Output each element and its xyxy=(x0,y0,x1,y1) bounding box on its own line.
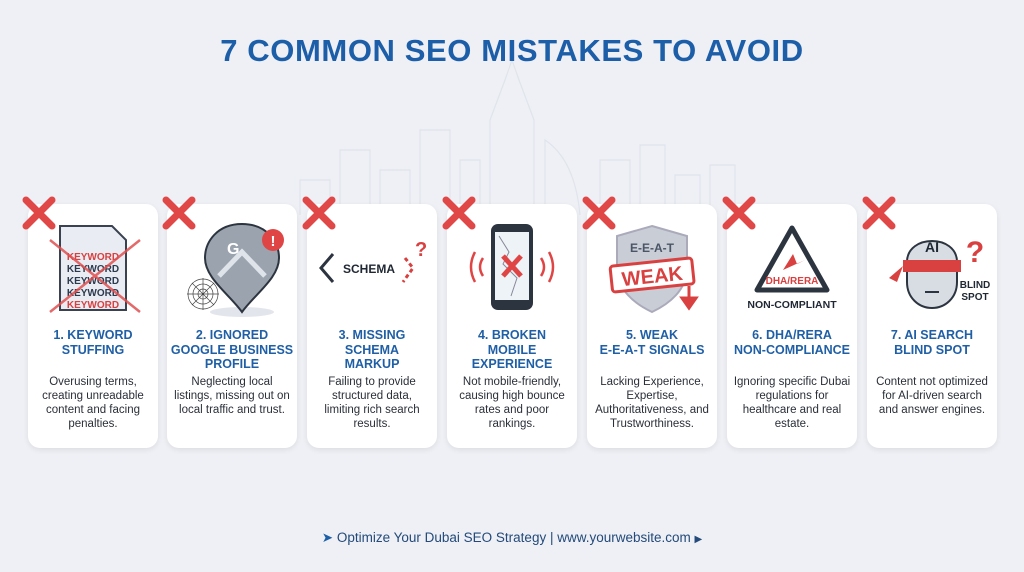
card 5 xyxy=(587,204,717,448)
description: Content not optimized for AI-driven search and answer engines. xyxy=(876,376,988,416)
heading xyxy=(53,328,133,356)
heading: STUFFING xyxy=(62,342,124,356)
heading: SCHEMA xyxy=(345,342,399,356)
heading xyxy=(891,328,973,356)
heading xyxy=(171,328,293,371)
heading: MOBILE xyxy=(488,342,536,356)
heading: PROFILE xyxy=(205,357,259,371)
heading: EXPERIENCE xyxy=(472,357,552,371)
icon: keyword document xyxy=(49,225,141,313)
icon: broken phone xyxy=(470,224,554,310)
heading: E-E-A-T SIGNALS xyxy=(600,342,704,356)
heading: MARKUP xyxy=(345,357,399,371)
heading xyxy=(472,328,552,371)
icon: map pin: G xyxy=(227,241,239,258)
icon: warning triangle: NON-COMPLIANT xyxy=(747,299,837,311)
icon: keyword document: KEYWORD xyxy=(67,300,119,311)
heading: 7. AI SEARCH xyxy=(891,328,973,342)
description: Ignoring specific Dubai regulations for healthcare and real estate. xyxy=(734,376,850,430)
icon: blindfolded AI head: AI xyxy=(925,239,939,255)
heading: 5. WEAK xyxy=(626,328,678,342)
icon: blindfolded AI head: ? xyxy=(966,236,984,269)
heading: 4. BROKEN xyxy=(478,328,546,342)
description: Not mobile-friendly, causing high bounce rates and poor rankings. xyxy=(459,376,565,430)
icon: schema brackets: SCHEMA xyxy=(343,262,395,276)
icon: weak shield: E-E-A-T xyxy=(630,241,675,255)
heading xyxy=(734,328,850,356)
icon: map pin: ! xyxy=(270,233,276,250)
title: 7 COMMON SEO MISTAKES TO AVOID xyxy=(220,33,804,68)
heading: 6. DHA/RERA xyxy=(752,328,832,342)
card 2 xyxy=(167,204,297,448)
description: Lacking Experience, Expertise, Authoritativeness, and Trustworthiness. xyxy=(595,376,709,430)
heading xyxy=(339,328,405,371)
icon: map pin xyxy=(187,223,284,317)
description: Failing to provide structured data, limiting rich search results. xyxy=(324,376,420,430)
heading: NON-COMPLIANCE xyxy=(734,342,850,356)
heading: 3. MISSING xyxy=(339,328,405,342)
card 3 xyxy=(307,204,437,448)
icon: keyword document: KEYWORD xyxy=(67,288,119,299)
red X marks xyxy=(22,196,896,230)
description: Overusing terms, creating unreadable content and facing penalties. xyxy=(42,376,144,430)
card 1 xyxy=(28,204,158,448)
card 7 xyxy=(867,204,997,448)
icon: warning triangle xyxy=(747,226,837,311)
icon: keyword document: KEYWORD xyxy=(67,276,119,287)
card 6 xyxy=(727,204,857,448)
description: Neglecting local listings, missing out on local traffic and trust. xyxy=(174,376,290,416)
icon: schema brackets: ? xyxy=(415,239,427,261)
heading: 1. KEYWORD xyxy=(53,328,133,342)
icon: warning triangle: DHA/RERA xyxy=(766,276,818,287)
icon: keyword document: KEYWORD xyxy=(67,264,119,275)
heading: BLIND SPOT xyxy=(894,342,970,356)
heading xyxy=(600,328,704,356)
icon: blindfolded AI head: BLIND xyxy=(960,280,990,291)
icon: keyword document: KEYWORD xyxy=(67,252,119,263)
icon: weak shield: WEAK xyxy=(621,263,684,291)
icon: blindfolded AI head: SPOT xyxy=(961,292,989,303)
card 4 xyxy=(447,204,577,448)
heading: 2. IGNORED xyxy=(196,328,268,342)
icon: weak shield xyxy=(608,225,699,313)
icon: blindfolded AI head xyxy=(889,236,990,309)
footer: ➤ Optimize Your Dubai SEO Strategy | www.yourwebsite.com ▶ xyxy=(322,530,702,545)
icon: schema brackets xyxy=(319,239,427,283)
heading: GOOGLE BUSINESS xyxy=(171,342,293,356)
